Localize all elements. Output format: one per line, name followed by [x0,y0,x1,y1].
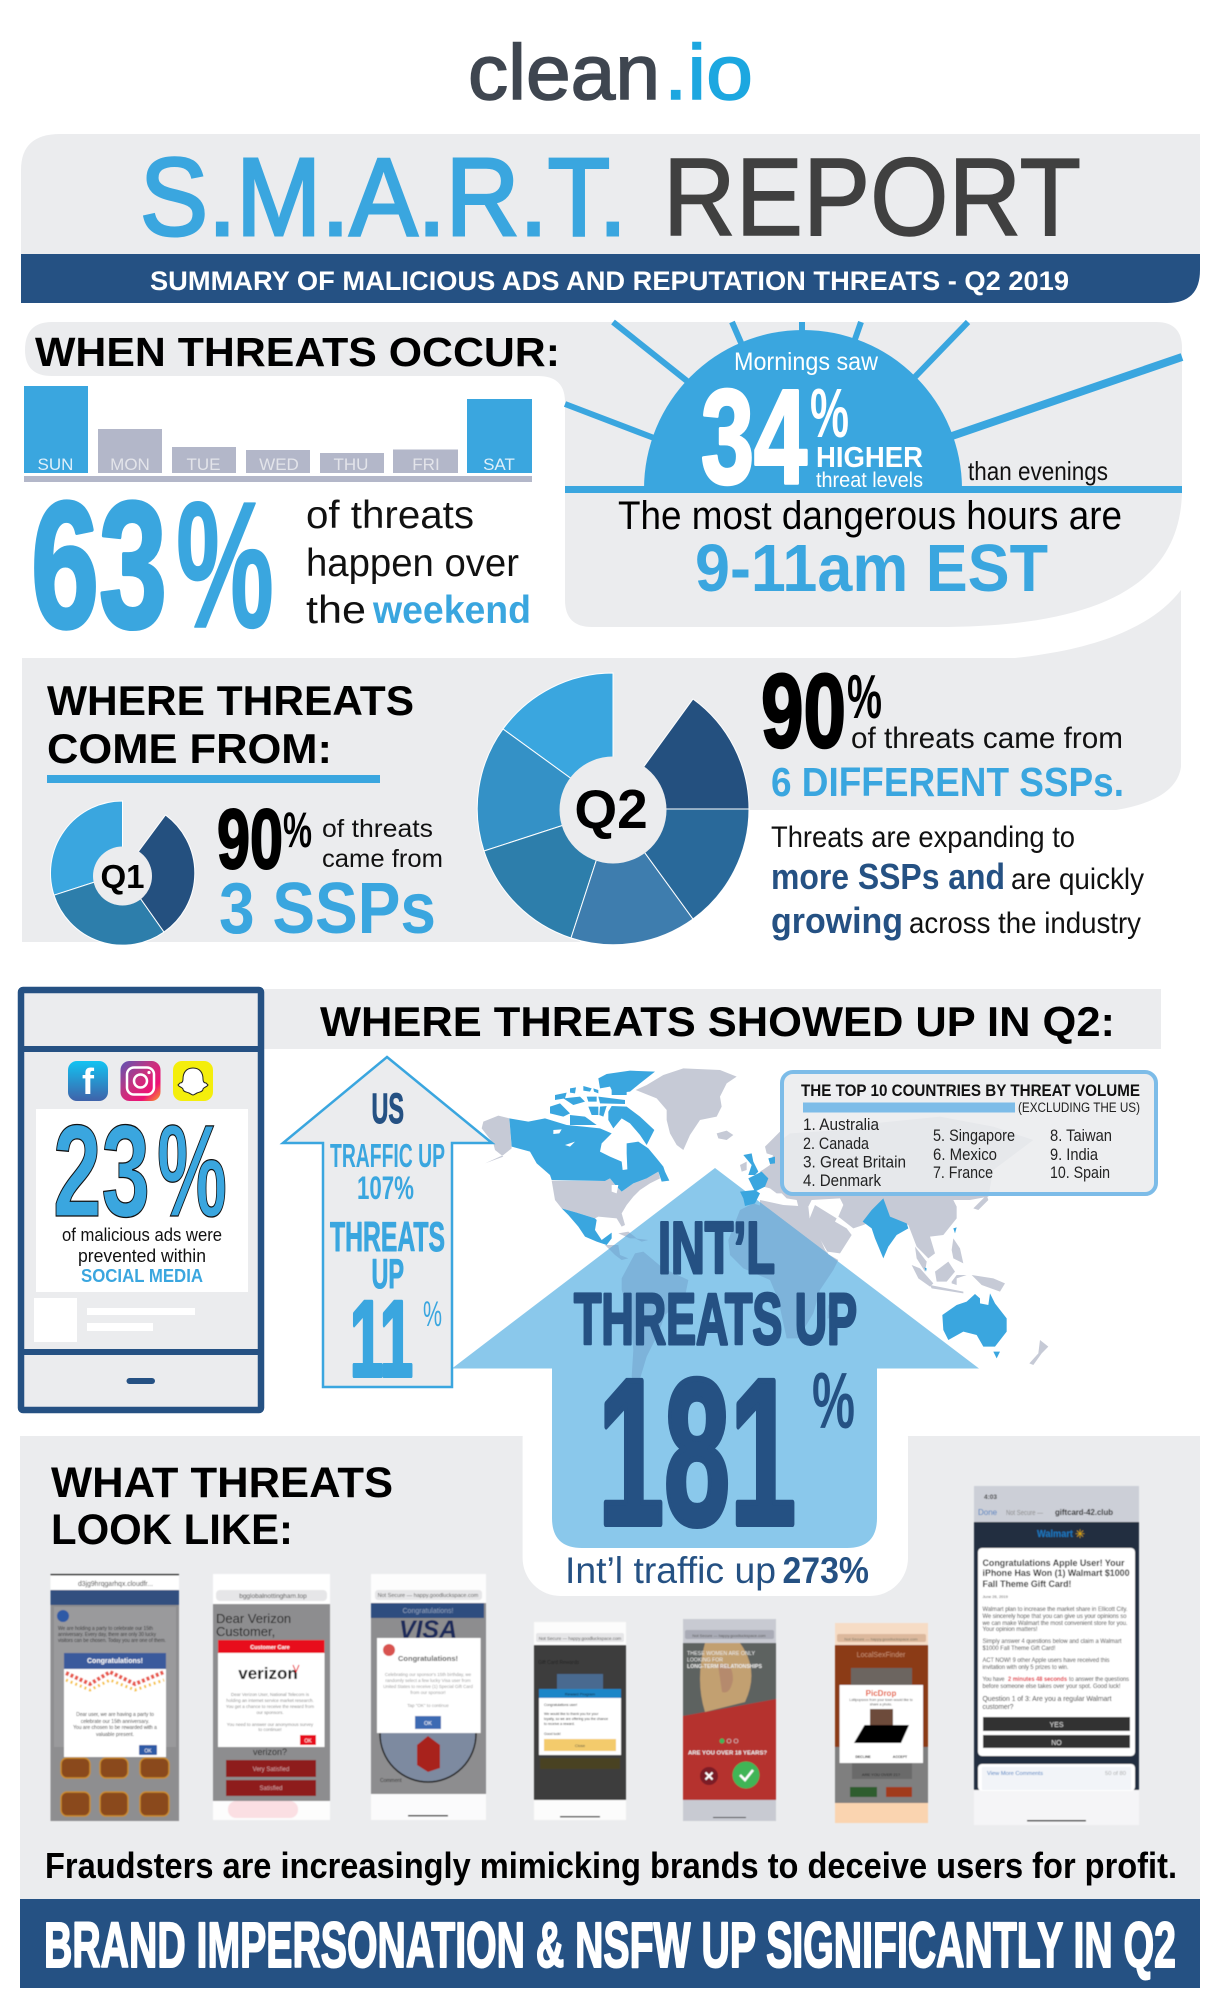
icon: facebook: f [82,1061,95,1102]
arrow: international threats [453,1168,979,1590]
icon: instagram [120,1061,160,1101]
text: threats are expanding: growing [771,900,903,941]
stat: Q1 90 percent 3 SSPs: came from [322,845,443,873]
title: S.M.A.R.T. REPORT: REPORT [663,136,1081,259]
logo: clean.io: clean [468,28,660,116]
screenshot: walmart gift card scam: ✳ [1075,1527,1085,1541]
icon: facebook [68,1061,108,1102]
screenshot: visa scam: Not Secure — happy.goodluckspace.com [378,1593,479,1599]
list: countries: 1. Australia [803,1115,879,1134]
screenshot: verizon scam: You get a chance to receive the reward from [226,1704,314,1709]
panel: when threats occur [24,322,1182,666]
card: 23 percent stat: SOCIAL MEDIA [81,1265,203,1286]
screenshot: walmart gift card scam: June 26, 2019 [982,1594,1009,1599]
screenshot: reward program scam: Good luck! [544,1732,561,1736]
heading: when threats occur: WHEN THREATS OCCUR: [35,329,560,375]
screenshot: walmart gift card scam: Fall Theme Gift Card! [982,1579,1072,1590]
screenshot: over 18 scam: LOOKING FOR [687,1658,723,1664]
screenshot: verizon scam: verizon? [253,1747,287,1757]
screenshot: picdrop scam: Not Secure — happy.goodluckspace.com [844,1636,918,1642]
text: of threats happen over the weekend: the [306,589,366,632]
screenshot: walmart gift card scam: View More Comments [987,1771,1044,1777]
screenshot: walmart gift card scam: Done [978,1508,998,1517]
screenshot: walmart gift card scam: $1000 Fall Theme Gift Card! [982,1646,1056,1652]
screenshot: verizon scam: to continue! [258,1727,282,1732]
bar chart: threats by weekday: THU [334,455,368,474]
screenshot: picdrop scam: LocalSexFinder [857,1652,906,1659]
text: mornings saw 34% higher [701,348,923,512]
text: INT'L threats up [574,1208,857,1360]
text: of threats happen over the weekend: of threats [306,494,474,537]
panel: where threats come from [22,590,1181,949]
screenshot: picdrop scam: DECLINE [855,1755,871,1759]
heading: what threats look like: LOOK LIKE: [51,1506,293,1554]
arrow: US threats [283,1057,492,1399]
screenshot: reward program scam: Not Secure — happy.goodluckspace.com [539,1636,621,1641]
bar chart: threats by weekday: FRI [412,455,440,474]
screenshot: walmart gift card scam: we can make Walmart the most convenient store for you. [982,1621,1128,1627]
screenshot: verizon scam: holding an internet service market research. [226,1698,314,1703]
screenshot: walmart gift card scam: to answer the questions [1069,1677,1129,1683]
heading: what threats look like [51,1459,393,1554]
bar chart: threats by weekday: TUE [186,455,220,474]
screenshot: visa scam: Comment [380,1778,402,1784]
callout: top 10 countries: (EXCLUDING THE US) [1018,1100,1140,1115]
arrow: US threats: % [423,1295,442,1334]
text: of threats happen over the weekend: weekend [372,589,531,632]
arrow: US threats: THREATS [330,1213,445,1260]
stat: 181 percent: % [812,1356,855,1445]
screenshot: over 18 scam: LONG-TERM RELATIONSHIPS [687,1664,763,1670]
text: than evenings: than evenings [968,456,1108,486]
list: countries [803,1115,1112,1190]
screenshot: verizon scam: You need to answer our anonymous survey [227,1722,314,1727]
screenshot: visa scam: Congratulations! [398,1654,458,1663]
text: mornings saw 34% higher: HIGHER [816,442,923,474]
screenshot: walmart gift card scam: Not Secure — [1006,1508,1043,1517]
logo: clean.io: .io [664,28,753,116]
heading: what threats look like: WHAT THREATS [51,1459,393,1507]
screenshot: walmart gift card scam: Walmart [1037,1529,1074,1540]
screenshot: walmart gift card scam: Simply answer 4 questions below and claim a Walmart [982,1639,1122,1645]
title: S.M.A.R.T. REPORT [140,136,1081,259]
screenshot: walmart gift card scam: We sincerely hope that you can give us your opinions so [982,1614,1127,1620]
screenshot: reward program scam: Reward Program [565,1692,596,1696]
subtitle: SUMMARY OF MALICIOUS ADS AND REPUTATION THREATS - Q2 2019 [150,266,1069,296]
stat: Q2 90 percent 6 different SSPs: % [847,663,882,732]
screenshot: reward program scam: loyalty, so we are offering you the chance [544,1717,608,1721]
screenshot: verizon scam: Dear Verizon User, National Telecom is [231,1692,310,1697]
screenshot: walmart gift card scam: NO [1051,1740,1062,1747]
stat: 9-11am EST: 9-11am EST [695,531,1048,606]
heading: where threats come from: WHERE THREATS [47,677,414,724]
screenshot: walmart gift card scam: Question 1 of 3: Are you a regular Walmart [982,1696,1112,1703]
screenshot: visa scam: Tap "OK" to continue [407,1703,449,1708]
text: of threats happen over the weekend: happen over [306,542,519,585]
screenshot: walmart gift card scam: before someone else takes over your spot. Good luck! [982,1684,1121,1690]
screenshot: facebook congratulations scam: celebrate our 15th anniversary. [81,1719,149,1725]
stat: Q1 90 percent 3 SSPs: % [283,802,312,858]
list: countries: 6. Mexico [933,1145,997,1164]
list: countries: 10. Spain [1050,1163,1110,1182]
text: mornings saw 34% higher: threat levels [816,469,923,492]
screenshot: facebook congratulations scam: visitors can be chosen. Today you are one of them. [58,1638,166,1644]
screenshot: picdrop scam: PicDrop [866,1689,896,1698]
screenshot: visa scam: OK [424,1721,432,1727]
screenshot: walmart gift card scam [974,1486,1139,1825]
arrow: US threats: TRAFFIC UP [330,1137,445,1174]
screenshot: picdrop scam: ARE YOU OVER 21? [862,1772,901,1777]
screenshot: walmart gift card scam: 4:03 [984,1494,997,1501]
panel: what threats look like background [20,1400,1200,1899]
screenshot: facebook congratulations scam: OK [144,1748,152,1754]
callout: top 10 countries: THE TOP 10 COUNTRIES BY THREAT VOLUME [801,1082,1140,1100]
screenshot: reward program scam: We would like to thank you for your [544,1712,599,1716]
card: 23 percent stat: of malicious ads were [62,1224,222,1245]
icon: sun with rays [565,322,1182,493]
chart: Q2 donut: Q2 [574,778,648,840]
screenshot: verizon scam: Satisfied [259,1786,283,1792]
list: countries: 3. Great Britain [803,1152,906,1172]
bar chart: threats by weekday: SUN [38,455,73,474]
screenshot: over 18 scam: ARE YOU OVER 18 YEARS? [688,1750,767,1756]
text: threats are expanding: Threats are expanding to [771,821,1075,854]
bar chart: threats by weekday: WED [259,455,299,474]
stat: Q1 90 percent 3 SSPs: 3 SSPs [219,869,436,949]
stat: Q2 90 percent 6 different SSPs [761,653,1124,805]
arrow: US threats: 107% [357,1170,414,1206]
title: S.M.A.R.T. REPORT: S.M.A.R.T. [140,136,627,259]
screenshot: visa scam: VISA [399,1616,457,1644]
list: countries: 2. Canada [803,1134,869,1153]
chart: Q2 donut [477,673,749,945]
screenshot: walmart gift card scam: 2 minutes 48 seconds [1008,1677,1068,1683]
screenshot: verizon scam [213,1574,330,1820]
text: threats are expanding: are quickly [1011,863,1144,896]
bar chart: threats by weekday: SAT [483,455,515,474]
screenshot: walmart gift card scam: Walmart plan to increase the market share in Ellicott City. [982,1607,1128,1613]
stat: Q2 90 percent 6 different SSPs: of threats came from [851,722,1123,755]
icon: snapchat [173,1061,213,1101]
text: threats are expanding [771,821,1144,941]
bar chart: threats by weekday [24,386,532,482]
screenshot: walmart gift card scam: Congratulations Apple User! Your [982,1558,1125,1569]
panel: phone with social media stat [18,990,264,1410]
stat: 63 percent: 63 [31,465,167,666]
screenshot: facebook congratulations scam: Congratulations! [87,1658,143,1665]
screenshot: facebook congratulations scam: valuable present. [96,1732,134,1738]
screenshot: reward program scam [534,1622,626,1820]
card: 23 percent stat: 23 [53,1097,150,1244]
heading: where threats come from: COME FROM: [47,725,332,772]
heading: where threats showed up in Q2: WHERE THREATS SHOWED UP IN Q2: [320,998,1115,1045]
screenshot: reward program scam: Gift Card Rewards [538,1660,580,1666]
card: 23 percent stat [36,1097,248,1292]
screenshot: visa scam: Congratulations! [403,1608,454,1615]
text: international traffic up 273 percent [565,1550,869,1591]
screenshot: reward program scam: Close [575,1743,586,1748]
bar chart: threats by weekday: MON [110,455,150,474]
stat: Q2 90 percent 6 different SSPs: 6 DIFFERENT SSPs. [771,759,1124,805]
screenshot: verizon scam: Customer Care [250,1645,290,1651]
stat: Q2 90 percent 6 different SSPs: 90 [761,653,846,770]
screenshot: verizon scam: Dear Verizon [216,1611,291,1626]
text: threats are expanding: more SSPs and [771,856,1005,897]
screenshot: verizon scam: verizon [238,1664,298,1683]
screenshot: facebook congratulations scam: d3jg9hrqgarhqx.cloudfr... [78,1581,153,1588]
screenshot: walmart gift card scam: invitation with only 5 prizes to win. [982,1665,1069,1671]
screenshot: picdrop scam: ACCEPT [893,1755,908,1759]
text: mornings saw 34% higher: 34 [701,363,807,512]
text: of threats happen over the weekend [306,494,531,632]
screenshot: walmart gift card scam: 50 of 80 [1105,1771,1126,1777]
screenshot: walmart gift card scam: giftcard-42.club [1055,1508,1113,1517]
screenshot: facebook congratulations scam: Dear user, we are having a party to [76,1712,154,1718]
screenshot: walmart gift card scam: iPhone Has Won (1) Walmart $1000 [982,1568,1130,1579]
stat: Q1 90 percent 3 SSPs [217,792,443,949]
screenshot: verizon scam: Customer, [216,1624,275,1639]
text: INT'L threats up: THREATS UP [574,1280,857,1360]
card: 23 percent stat: prevented within [78,1245,206,1266]
screenshot: reward program scam: Congratulations user! [544,1703,577,1707]
text: INT'L threats up: INT’L [658,1208,775,1289]
list: countries: 5. Singapore [933,1126,1015,1145]
screenshot: facebook congratulations scam [50,1574,179,1821]
panel: where threats showed up [264,989,1161,1049]
logo: clean.io [468,28,753,116]
screenshot: facebook congratulations scam: You are chosen to be rewarded with a [73,1725,157,1731]
text: international traffic up 273 percent: Int’l traffic up [565,1550,776,1591]
screenshot: facebook congratulations scam: anniversary. Every day, there are only 30 lucky [58,1632,156,1638]
screenshot: visa scam: from our sponsor! [410,1690,446,1695]
screenshot: visa scam: randomly select a few lucky Visa user from [385,1678,471,1683]
screenshot: visa scam: United States to receive (1) Special Gift Card [383,1684,473,1689]
card: 23 percent stat: % [157,1097,227,1244]
text: mornings saw 34% higher: Mornings saw [734,348,879,376]
map: world with top countries highlighted [482,1068,1048,1390]
screenshot: visa scam: Celebrating our sponsor's 15th birthday, we [385,1672,472,1677]
screenshot: verizon scam: bgglobalnottingham.top [239,1593,307,1600]
screenshot: over 18 scam: Not Secure — happy.goodluckspace.com [692,1633,766,1638]
text: mornings saw 34% higher: % [810,374,849,452]
list: countries: 7. France [933,1163,993,1182]
arrow: US threats: 11 [350,1278,413,1399]
text: most dangerous hours: The most dangerous hours are [618,494,1122,538]
screenshot: verizon scam: Very Satisfied [253,1767,289,1773]
header panel [21,134,1200,303]
screenshot: walmart gift card scam: You have [982,1677,1005,1683]
list: countries: 9. India [1050,1145,1098,1164]
screenshot: picdrop scam: share a photo. [870,1702,892,1706]
heading: where threats come from [47,677,414,772]
screenshot: walmart gift card scam: Your opinion matters! [982,1627,1038,1633]
stat: Q1 90 percent 3 SSPs: 90 [217,792,283,886]
screenshot: walmart gift card scam: customer? [982,1704,1014,1711]
screenshot: verizon scam: our sponsors. [256,1710,284,1715]
screenshot: picdrop scam: Lollipopsxxx from your town would like to [849,1698,913,1702]
list: countries: 4. Denmark [803,1171,881,1190]
chart: Q1 donut [50,801,195,945]
arrow: US threats: US [372,1085,404,1133]
text: threats are expanding: across the industry [909,907,1141,940]
screenshot: over 18 scam: THESE WOMEN ARE ONLY [687,1651,756,1657]
screenshot: over 18 scam [683,1619,776,1821]
stat: 181 percent: 181 [598,1337,796,1569]
screenshot: picdrop scam [835,1623,928,1823]
screenshot: visa scam [371,1574,486,1820]
callout: top 10 countries [782,1072,1156,1194]
screenshot: reward program scam: to receive a reward. [544,1722,575,1726]
screenshot: facebook congratulations scam: We are holding a party to celebrate our 15th [58,1626,153,1632]
stat: 63 percent: % [176,465,274,666]
screenshot: verizon scam: OK [304,1738,312,1744]
text: international traffic up 273 percent: 273% [782,1550,869,1591]
stat: Q1 90 percent 3 SSPs: of threats [322,815,433,843]
arrow: US threats: UP [372,1250,404,1297]
chart: Q1 donut: Q1 [100,858,145,895]
list: countries: 8. Taiwan [1050,1126,1112,1145]
screenshot: walmart gift card scam: YES [1049,1722,1064,1729]
screenshot: walmart gift card scam: ACT NOW! 9 other Apple users have received this [982,1658,1110,1664]
